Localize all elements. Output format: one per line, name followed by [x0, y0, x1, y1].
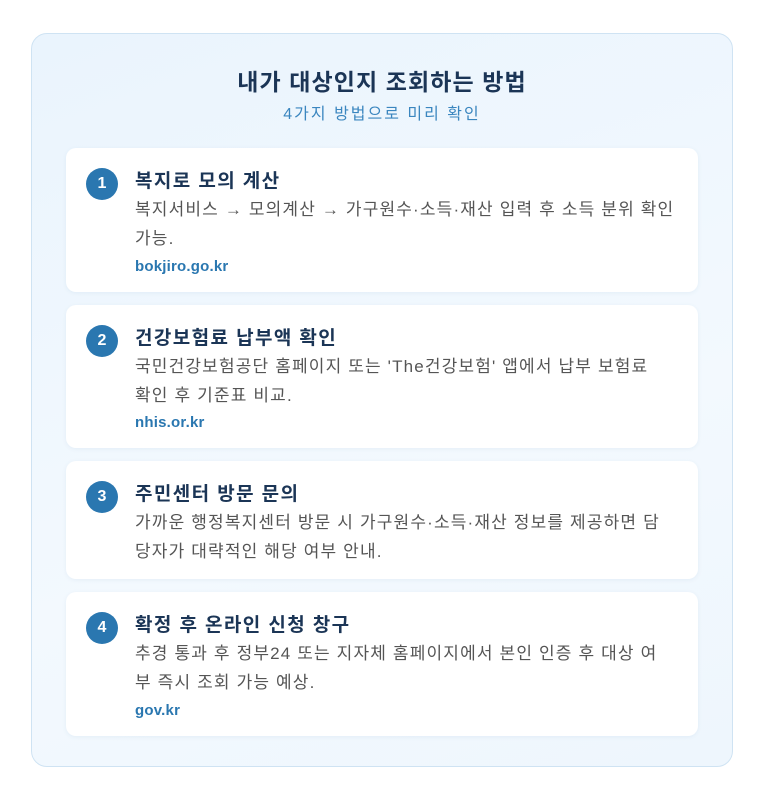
- card 2 body: 확인 후 기준표 비교.: [135, 386, 293, 405]
- card 2 body: [135, 357, 648, 405]
- card 4: [66, 592, 698, 736]
- card 4 body: 부 즉시 조회 가능 예상.: [135, 673, 315, 692]
- icon: number 2: 2: [98, 332, 106, 349]
- icon: number 1: [86, 168, 118, 200]
- card 1 body: 복지서비스 → 모의계산 → 가구원수·소득·재산 입력 후 소득 분위 확인 가능.: [135, 200, 674, 248]
- icon: number 4: [86, 612, 118, 644]
- icon: number 1: 1: [98, 175, 106, 192]
- card 2 heading: 건강보험료 납부액 확인: [135, 328, 337, 349]
- icon: number 4: 4: [98, 619, 106, 636]
- card 2 body: 국민건강보험공단 홈페이지 또는 'The건강보험' 앱에서 납부 보험료: [135, 357, 648, 376]
- card 2: [66, 305, 698, 448]
- card 1 heading: 복지로 모의 계산: [135, 171, 281, 192]
- icon: number 3: [86, 481, 118, 513]
- card 1 link: bokjiro.go.kr: [135, 258, 228, 275]
- card 3 body: 가까운 행정복지센터 방문 시 가구원수·소득·재산 정보를 제공하면 담: [135, 513, 660, 532]
- card 4 heading: 확정 후 온라인 신청 창구: [135, 615, 351, 636]
- card 3 body: [135, 513, 660, 561]
- card 3 heading: 주민센터 방문 문의: [135, 484, 299, 505]
- card 3: [66, 461, 698, 579]
- card 4 body: 추경 통과 후 정부24 또는 지자체 홈페이지에서 본인 인증 후 대상 여: [135, 644, 657, 663]
- card 2 link: nhis.or.kr: [135, 414, 205, 431]
- card 1: [66, 148, 698, 292]
- title: 내가 대상인지 조회하는 방법: [237, 69, 527, 95]
- card 3 body: 당자가 대략적인 해당 여부 안내.: [135, 542, 383, 561]
- icon: number 3: 3: [98, 488, 106, 505]
- card 4 link: gov.kr: [135, 702, 180, 719]
- subtitle: 4가지 방법으로 미리 확인: [283, 106, 481, 123]
- card 4 body: [135, 644, 657, 692]
- icon: number 2: [86, 325, 118, 357]
